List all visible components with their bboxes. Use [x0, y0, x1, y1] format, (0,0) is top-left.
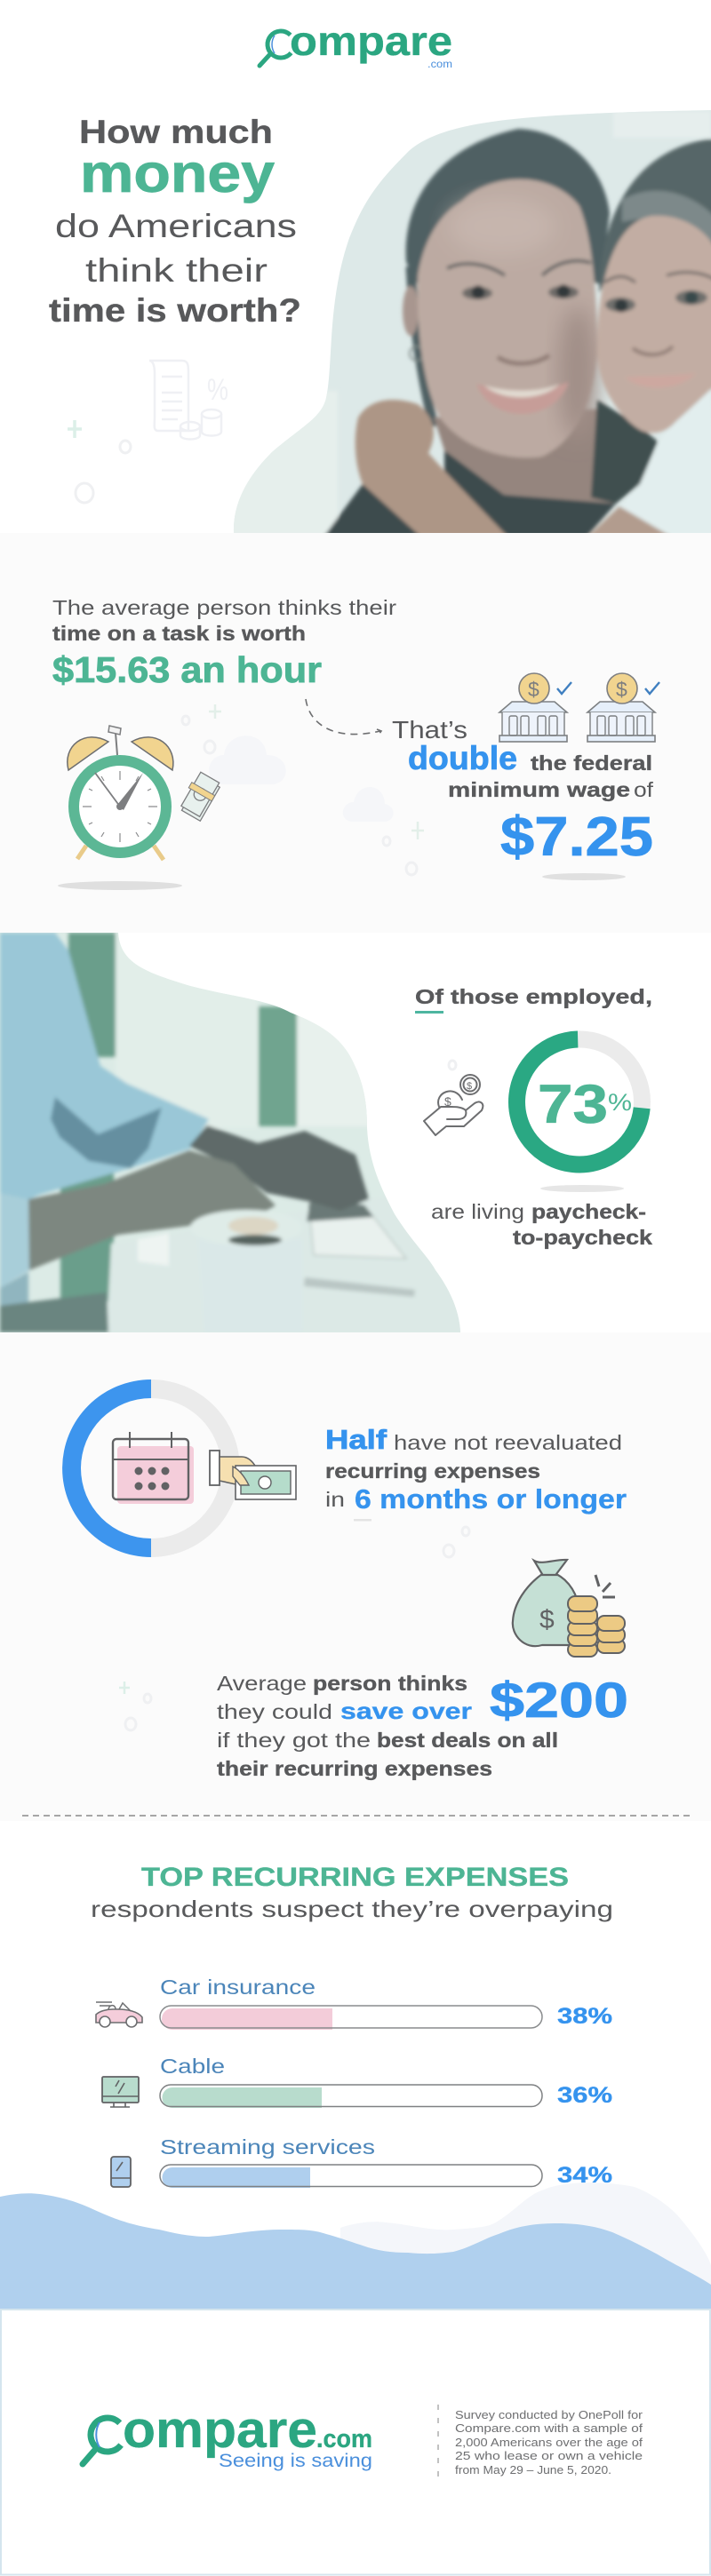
bar: streaming services 34%: 34%: [557, 2163, 612, 2188]
photo: mother and child: [222, 98, 711, 542]
text: average person: $15.63 an hour: [52, 649, 322, 690]
dark side between faces: [591, 400, 658, 504]
text: average person: time on a task is worth: [52, 622, 306, 645]
icon: money bag and coins: $: [539, 1605, 555, 1634]
text: that's double: minimum wage: [448, 778, 630, 801]
text: living paycheck: to-paycheck: [513, 1226, 652, 1249]
text: half have not reevaluated: Half: [325, 1424, 387, 1455]
text: that's double: [392, 716, 654, 880]
title: How much: [79, 114, 273, 150]
logo: Compare.com Seeing is saving: Seeing is saving: [219, 2451, 372, 2471]
bar: cable 36%: [160, 2055, 612, 2108]
text: that's double: double: [408, 740, 517, 776]
text: survey note: 2,000 Americans over the age of: [455, 2436, 643, 2449]
shirt: [0, 933, 209, 1199]
heading: of those employed: Of those employed,: [415, 985, 652, 1008]
cup: [198, 1239, 302, 1332]
hugging arm: [356, 400, 513, 542]
text: could save over $200: Average: [217, 1672, 307, 1695]
logo: Compare.com top: [260, 18, 452, 70]
child hair: [599, 139, 711, 293]
logo: Compare.com Seeing is saving: [83, 2401, 372, 2471]
mother hair: [406, 129, 610, 284]
bar: cable 36%: 36%: [557, 2083, 612, 2108]
icon: phone: [111, 2157, 131, 2187]
panel: paycheck to paycheck: [0, 933, 652, 1332]
title: time is worth?: [49, 292, 301, 329]
logo: Compare.com top: .com: [427, 58, 452, 70]
photo: hands typing on laptop: [0, 933, 471, 1332]
chart: 73 percent donut: 73: [538, 1074, 608, 1134]
title: think their: [85, 252, 268, 289]
title: do Americans: [55, 208, 297, 244]
panel: top recurring expenses: [91, 1863, 613, 2188]
text: half have not reevaluated: 6 months or longer: [355, 1483, 627, 1515]
shirts: [444, 450, 616, 542]
panel: hero: [49, 18, 711, 542]
text: that's double: the federal: [531, 751, 652, 775]
decorative waves: [0, 2182, 711, 2310]
chart: half donut with calendar: [62, 1379, 296, 1557]
logo: Compare.com top: ompare: [290, 18, 452, 64]
icon: monitor: [102, 2077, 139, 2107]
icon: hand paying cash: [210, 1451, 296, 1499]
text: half have not reevaluated: recurring expenses: [325, 1459, 540, 1483]
text: average person: [52, 596, 396, 690]
panel: footer: [1, 2310, 710, 2574]
text: average person: The average person thinks their: [52, 596, 396, 619]
panel: average time value: [0, 533, 711, 933]
title: [49, 114, 301, 329]
icon: receipt and coins: %: [207, 373, 228, 407]
text: survey note: Compare.com with a sample of: [455, 2421, 643, 2435]
icon: bank two: [587, 673, 659, 742]
text: survey note: Survey conducted by OnePoll for: [455, 2408, 643, 2421]
back hand: [189, 1125, 369, 1211]
icon: calendar: [113, 1432, 194, 1504]
mother brows, eyes, nose, mouth: [447, 261, 591, 275]
icon: bank two: $: [616, 678, 627, 701]
text: that's double: $7.25: [500, 807, 653, 868]
chart: 73 percent donut: %: [608, 1089, 632, 1116]
text: half have not reevaluated: in: [325, 1488, 345, 1511]
icon: bank one: [499, 673, 571, 742]
text: could save over $200: best deals on all: [377, 1729, 558, 1752]
chart: 73 percent donut: [511, 1033, 648, 1192]
icon: hand with coins: $: [444, 1094, 451, 1109]
heading: of those employed: [415, 985, 652, 1014]
text: survey note: 25 who lease or own a vehicle: [455, 2449, 643, 2462]
text: half have not reevaluated: have not reevaluated: [394, 1431, 622, 1454]
front arm and hand: [28, 1150, 276, 1270]
decorative clouds and marks: [182, 704, 424, 875]
text: could save over $200: they could: [217, 1700, 332, 1723]
text: could save over $200: if they got the: [217, 1729, 371, 1752]
text: living paycheck: [431, 1200, 652, 1249]
icon: hand with coins: [424, 1061, 483, 1135]
icon: bank one: $: [528, 678, 539, 701]
heading: TOP RECURRING EXPENSES: [141, 1863, 569, 1892]
panel: recurring expenses savings: [0, 1332, 711, 1821]
decorative marks: [68, 420, 131, 503]
bar: car insurance 38%: Car insurance: [160, 1976, 316, 1999]
table and keyboard: [105, 1197, 460, 1332]
text: could save over $200: person thinks: [313, 1672, 467, 1695]
icon: money bag and coins: [513, 1560, 625, 1657]
bar: car insurance 38%: 38%: [557, 2004, 612, 2029]
icon: cash bundle: [177, 771, 221, 821]
icon: alarm clock: [58, 726, 182, 890]
text: that's double: of: [634, 778, 654, 801]
text: living paycheck: are living: [431, 1200, 524, 1223]
text: that's double: That’s: [392, 716, 467, 743]
arrow: dashed curve: [306, 699, 381, 735]
icon: receipt and coins: [149, 361, 228, 439]
text: could save over $200: $200: [490, 1672, 628, 1728]
text: living paycheck: paycheck-: [531, 1200, 646, 1223]
logo: Compare.com Seeing is saving: .com: [316, 2425, 372, 2453]
text: survey note: from May 29 – June 5, 2020.: [455, 2463, 611, 2477]
title: money: [80, 143, 275, 203]
text: could save over $200: their recurring expenses: [217, 1757, 492, 1780]
icon: hand with coins: $: [467, 1081, 472, 1092]
bar: streaming services 34%: [160, 2135, 612, 2188]
text: half have not reevaluated: [325, 1424, 627, 1515]
mother face: [418, 179, 597, 457]
child face: [597, 216, 711, 433]
logo: Compare.com Seeing is saving: ompare: [123, 2401, 317, 2459]
bar: streaming services 34%: Streaming services: [160, 2135, 375, 2159]
heading: [91, 1863, 613, 1922]
text: could save over $200: save over: [340, 1697, 472, 1724]
heading: respondents suspect they’re overpaying: [91, 1896, 613, 1922]
bar: car insurance 38%: [160, 1976, 612, 2030]
decorative marks: [119, 1519, 469, 1730]
icon: car: [96, 2002, 142, 2027]
mother neck and ear: [434, 409, 616, 504]
bar: cable 36%: Cable: [160, 2055, 225, 2078]
text: survey note: [455, 2408, 643, 2477]
text: could save over $200: [217, 1672, 628, 1780]
